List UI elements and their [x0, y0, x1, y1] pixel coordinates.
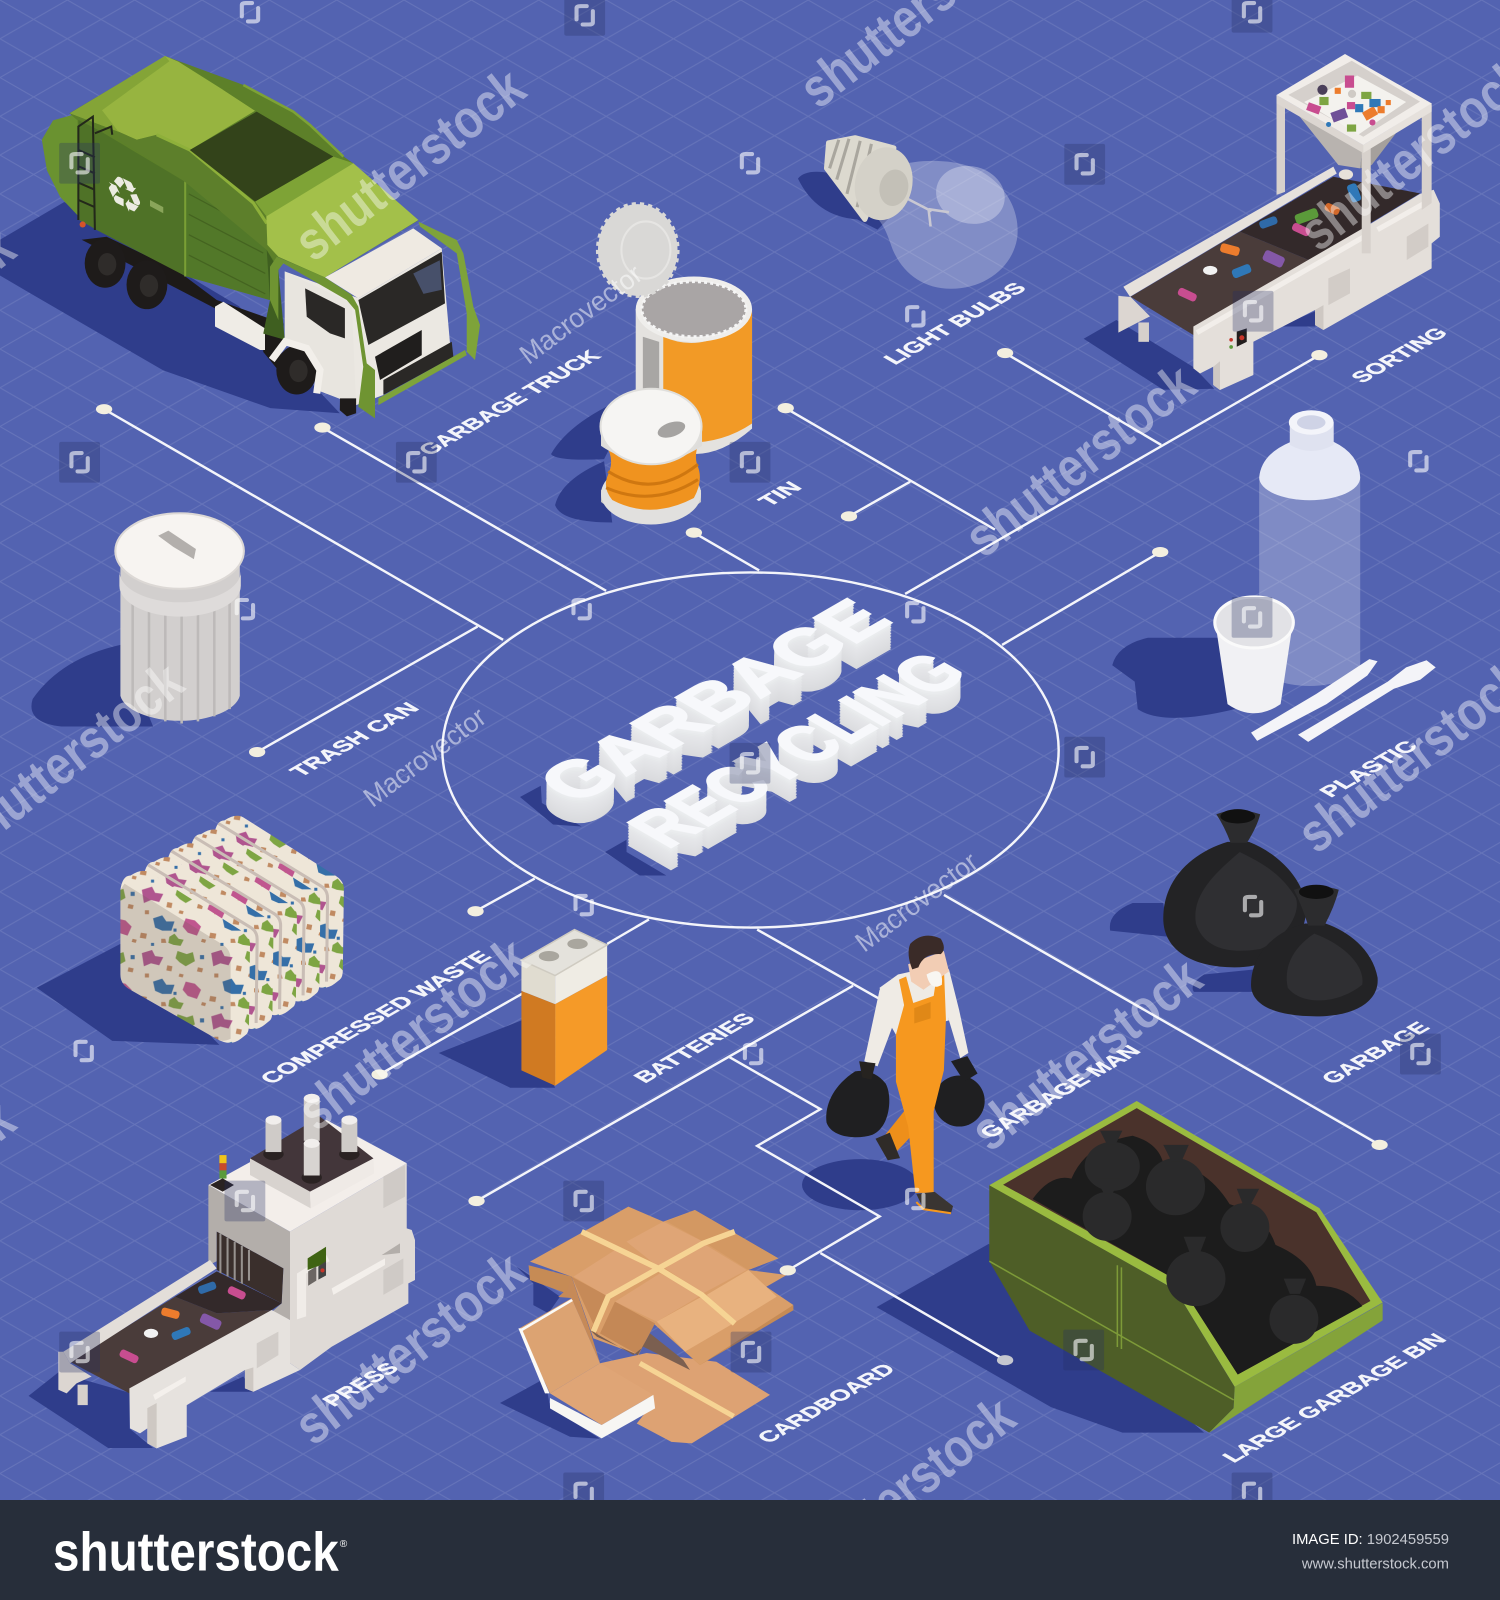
bulb base: [827, 138, 894, 219]
lid: [598, 204, 678, 296]
watermark: shutterstock text: shutterstock: [282, 55, 536, 273]
hopper: [1277, 54, 1432, 253]
illustration: garbage man: [802, 936, 985, 1213]
label: plastic: PLASTIC: [1314, 737, 1423, 800]
cab side: [285, 272, 356, 403]
press control panel: [297, 1247, 330, 1319]
illustration: garbage truck: [0, 56, 480, 418]
far bag: [934, 1076, 985, 1127]
illustration: tin cans: [551, 204, 752, 524]
illustration: cardboard: [500, 1207, 793, 1443]
footer image id: IMAGE ID: 1902459559: [1292, 1532, 1449, 1548]
battery shadow: [439, 1020, 555, 1088]
label: large garbage bin: LARGE GARBAGE BIN: [1217, 1330, 1452, 1466]
bin shadow: [877, 1244, 1204, 1433]
hopper waste: [1306, 76, 1391, 132]
interior shadow: [590, 1330, 690, 1370]
press front frame: [129, 1310, 300, 1448]
press cylinders: [263, 1094, 360, 1184]
recycling icon: ♻: [105, 160, 144, 229]
watermark: macrovector text: Macrovector: [849, 846, 984, 958]
illustration: garbage bags: [1110, 809, 1378, 1016]
cup: [1215, 622, 1293, 713]
label: sorting: SORTING: [1346, 324, 1453, 386]
arms: [864, 978, 898, 1066]
left leg: [1118, 296, 1150, 333]
label: press: PRESS: [317, 1359, 404, 1410]
overalls: [896, 967, 946, 1193]
watermark: macrovector text: [357, 258, 984, 958]
illustration: trash can: [31, 513, 244, 727]
pizza box: [518, 1298, 655, 1438]
labels: [255, 279, 1453, 1466]
label: garbage: GARBAGE: [1316, 1019, 1435, 1087]
label: compressed waste: COMPRESSED WASTE: [255, 948, 497, 1087]
watermark: shutterstock text: shutterstock: [282, 1239, 536, 1456]
press main block: [290, 1163, 415, 1370]
head: [908, 951, 949, 990]
man shadow: [802, 1159, 918, 1210]
shirt: [880, 964, 949, 1035]
title line: recycling: RECYCLING: [612, 642, 985, 858]
illustration: battery: [439, 930, 607, 1088]
small bag: [1251, 923, 1378, 1016]
illustration: light bulb: [798, 138, 1018, 289]
bale shadow: [37, 944, 219, 1045]
shoe: [916, 1192, 953, 1213]
illustration: sorting machine: [1084, 54, 1440, 390]
flowchart connectors: [96, 348, 1388, 1206]
label: trash can: TRASH CAN: [285, 699, 425, 780]
footer bar: [0, 1500, 1500, 1600]
control box: [1229, 328, 1247, 349]
fork: [1298, 660, 1436, 742]
label: cardboard: CARDBOARD: [752, 1360, 901, 1446]
watermark: macrovector text: Macrovector: [357, 701, 492, 813]
cardboard and large bin connectors: [730, 1057, 1013, 1365]
label: tin: TIN: [753, 478, 807, 510]
belt: [1131, 232, 1317, 335]
plastic shadow: [1112, 638, 1240, 718]
bumper block: [263, 327, 285, 369]
bin bags: [1083, 1131, 1318, 1344]
can shadows: [551, 393, 638, 522]
can shadow: [31, 645, 153, 727]
illustration: press machine: [29, 1094, 415, 1448]
open can: [636, 309, 752, 454]
press signal light: [210, 1155, 234, 1192]
title line: garbage: GARBAGE: [521, 589, 908, 813]
upper cardboard stack: [529, 1265, 571, 1293]
machine shadow: [1084, 311, 1315, 390]
conveyor items: [1177, 169, 1362, 302]
label: batteries: BATTERIES: [628, 1010, 761, 1086]
press shadow: [29, 1372, 253, 1448]
bags shadow: [1110, 903, 1255, 992]
loader arms: [418, 222, 480, 360]
dark cab gap: [263, 250, 285, 340]
bin garbage: [1033, 1136, 1362, 1374]
ladder: [78, 117, 112, 230]
cab front: [325, 228, 442, 298]
cardboard shadow: [500, 1266, 600, 1439]
machine body: [1193, 190, 1440, 390]
watermark: shutterstock text: shutterstock: [953, 351, 1207, 569]
knife: [1251, 659, 1378, 741]
cardboard connecting fold: [558, 1277, 600, 1363]
watermark: shutterstock text: shutterstock: [286, 925, 539, 1142]
tape: [582, 1232, 735, 1332]
label: garbage man: GARBAGE MAN: [974, 1042, 1146, 1141]
press top plate: [250, 1158, 311, 1208]
watermark: shutterstock text: shutterstock: [959, 945, 1213, 1163]
large bag: [1163, 842, 1306, 967]
bottle: [1259, 422, 1360, 686]
rear dome: [42, 115, 82, 216]
label: light bulbs: LIGHT BULBS: [878, 279, 1032, 368]
bulb shadow: [798, 172, 898, 230]
crushed can: [601, 490, 701, 521]
lower cardboard: [600, 1353, 770, 1443]
top surface: [70, 56, 255, 150]
truck shadow: [0, 202, 340, 413]
glass globe: [876, 161, 1018, 289]
truck body underlay: [69, 56, 418, 300]
footer registered mark: ®: [340, 1539, 348, 1550]
press belt: [70, 1297, 272, 1393]
title ground shadows: [520, 786, 666, 876]
illustration: compressed waste bales: [37, 816, 344, 1045]
label: garbage truck: GARBAGE TRUCK: [413, 347, 607, 459]
press left leg: [58, 1352, 92, 1393]
press left wall: [208, 1185, 290, 1320]
cab underlay: [285, 271, 450, 405]
illustration: plastic items: [1112, 410, 1436, 742]
side panels: [78, 120, 187, 277]
illustration: large garbage bin: [877, 1101, 1383, 1433]
near bag: [826, 1071, 889, 1137]
watermark: macrovector text: Macrovector: [514, 258, 648, 370]
far leg: [884, 1106, 923, 1158]
press belt items: [119, 1281, 247, 1364]
footer url: www.shutterstock.com: [1301, 1556, 1449, 1572]
footer logo: shutterstock: [53, 1520, 339, 1582]
